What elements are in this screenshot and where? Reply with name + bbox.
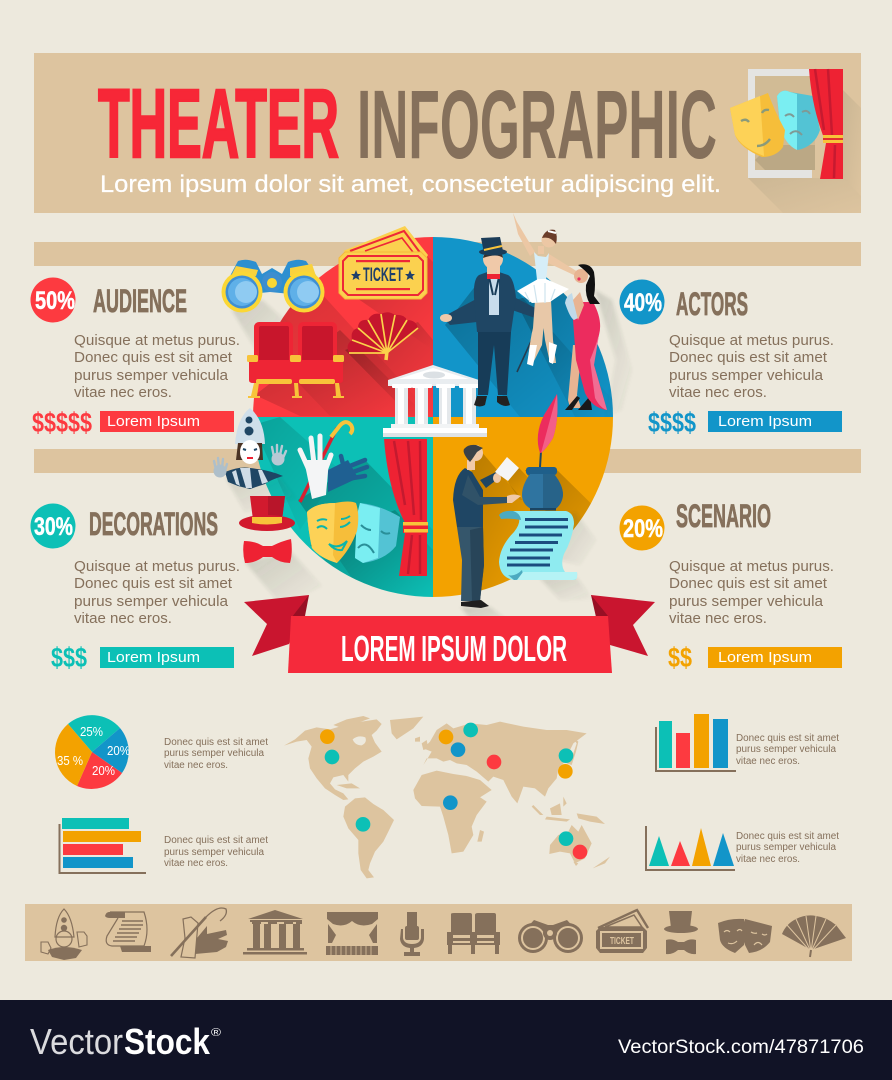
badge 50% <box>30 278 76 322</box>
band: upper tan strip <box>34 242 861 266</box>
strip icon: microphone <box>400 912 424 956</box>
banner text: LOREM IPSUM DOLOR <box>341 628 567 669</box>
heading scenario: SCENARIO <box>676 498 771 534</box>
icon: pierrot clown <box>214 408 286 489</box>
text: bar note: purus semper vehicula <box>164 847 264 858</box>
label bar: Lorem Ipsum <box>107 649 200 666</box>
text: pie note <box>164 737 268 771</box>
icon: framed theatre masks and curtain <box>730 69 861 213</box>
text block: vitae nec eros. <box>74 384 172 401</box>
strip icon: seats <box>447 913 500 954</box>
icon: curtain <box>384 439 428 576</box>
world map with location dots <box>284 716 610 878</box>
icon: quill and ink bottle <box>522 394 563 510</box>
text block: Quisque at metus purus. <box>669 558 834 575</box>
badge 40% <box>620 280 664 324</box>
text: pie note: purus semper vehicula <box>164 748 264 759</box>
text block <box>669 332 834 401</box>
label bar <box>100 411 234 432</box>
heading actors: ACTORS <box>676 286 748 322</box>
footer bar <box>0 1000 892 1080</box>
strip icon: ticket <box>596 910 648 953</box>
badge 40%: 40% <box>624 289 662 317</box>
strip icon: ticket: TICKET <box>610 935 634 947</box>
text block: Donec quis est sit amet <box>74 575 233 592</box>
text: triangle note: Donec quis est sit amet <box>736 831 839 842</box>
footer url: VectorStock.com/47871706 <box>618 1037 864 1058</box>
title: THEATER <box>98 69 339 178</box>
text block: vitae nec eros. <box>669 384 767 401</box>
text block: purus semper vehicula <box>669 593 824 610</box>
text: column note: Donec quis est sit amet <box>736 733 839 744</box>
footer logo: ® <box>211 1027 221 1039</box>
icon: folding fan <box>348 312 418 360</box>
figure: man in tuxedo <box>440 237 546 406</box>
text block: purus semper vehicula <box>669 367 824 384</box>
icon: binoculars <box>222 260 324 312</box>
pie chart <box>55 715 130 789</box>
long shadows off circle <box>226 290 632 626</box>
band: lower tan strip <box>34 449 861 473</box>
badge 30% <box>30 504 76 548</box>
text: triangle note: purus semper vehicula <box>736 842 836 853</box>
icon: paper scroll <box>499 511 577 580</box>
text block <box>669 558 834 627</box>
icon: ticket <box>339 226 428 299</box>
long shadows on circle <box>228 256 613 597</box>
label bar: Lorem Ipsum <box>718 649 812 666</box>
triangle chart <box>646 826 735 870</box>
icon: theatre seats <box>247 322 344 398</box>
strip icon: hat and bow tie <box>664 911 698 954</box>
strip icon: masks <box>718 919 772 953</box>
text block: Donec quis est sit amet <box>74 349 233 366</box>
text: triangle note <box>736 831 839 865</box>
text block: Donec quis est sit amet <box>669 575 828 592</box>
pie chart: 25% <box>80 725 103 739</box>
badge 30%: 30% <box>34 513 73 541</box>
text: column note: vitae nec eros. <box>736 756 800 767</box>
icon: gloves and umbrella <box>300 422 367 502</box>
horizontal bar chart <box>60 818 146 873</box>
text: bar note <box>164 835 268 869</box>
icon: ticket: TICKET <box>363 265 403 286</box>
text block <box>74 558 240 627</box>
panel: audience <box>30 278 240 438</box>
pie chart: 20% <box>107 744 130 758</box>
text: column note <box>736 733 839 767</box>
subtitle: Lorem ipsum dolor sit amet, consectetur adipiscing elit. <box>100 171 721 198</box>
panel: actors <box>620 280 842 438</box>
footer logo <box>30 1021 221 1062</box>
text block <box>74 332 240 401</box>
badge 20%: 20% <box>623 515 663 543</box>
icon strip <box>25 904 852 961</box>
icon: bow tie <box>243 539 292 563</box>
header panel <box>34 53 861 213</box>
price rating: $$$$ <box>648 407 696 438</box>
footer logo: Stock <box>124 1021 211 1062</box>
strip icon: stage <box>326 912 378 955</box>
panel: scenario <box>620 498 842 673</box>
text block: purus semper vehicula <box>74 367 229 384</box>
pie chart: 20% <box>92 764 115 778</box>
figure: ballerina <box>513 213 578 366</box>
text: pie note: Donec quis est sit amet <box>164 737 268 748</box>
text block: Quisque at metus purus. <box>669 332 834 349</box>
badge 50%: 50% <box>35 287 75 315</box>
panel: decorations <box>30 504 240 673</box>
text: bar note: Donec quis est sit amet <box>164 835 268 846</box>
pie chart: 35 % <box>57 754 83 768</box>
text block: purus semper vehicula <box>74 593 229 610</box>
figure: man with book <box>453 445 521 608</box>
strip icon: binoculars <box>518 920 583 953</box>
text: bar note: vitae nec eros. <box>164 858 228 869</box>
text block: Donec quis est sit amet <box>669 349 828 366</box>
footer logo: Vector <box>30 1021 123 1062</box>
label bar <box>100 647 234 668</box>
label bar: Lorem Ipsum <box>107 413 200 430</box>
strip icon: fan <box>782 915 846 957</box>
text: pie note: vitae nec eros. <box>164 760 228 771</box>
label bar <box>708 647 842 668</box>
icon: comedy and tragedy masks <box>307 502 400 563</box>
ribbon banner <box>244 595 655 673</box>
icon: temple <box>383 365 487 437</box>
price rating: $$$$$ <box>32 407 92 438</box>
text: triangle note: vitae nec eros. <box>736 854 800 865</box>
label bar <box>708 411 842 432</box>
strip icon: scroll <box>105 912 151 952</box>
text block: Quisque at metus purus. <box>74 332 240 349</box>
price rating: $$$ <box>51 642 87 673</box>
text: column note: purus semper vehicula <box>736 744 836 755</box>
text block: vitae nec eros. <box>74 610 172 627</box>
strip icon: gloves <box>171 908 228 958</box>
text block: vitae nec eros. <box>669 610 767 627</box>
strip icon: temple <box>243 910 307 954</box>
central four-colour circle chart <box>253 237 613 597</box>
text block: Quisque at metus purus. <box>74 558 240 575</box>
icon: top hat <box>239 496 295 531</box>
heading audience: AUDIENCE <box>93 283 187 319</box>
column chart <box>656 714 736 771</box>
badge 20% <box>620 506 664 550</box>
label bar: Lorem Ipsum <box>718 413 812 430</box>
price rating: $$ <box>668 642 692 673</box>
heading decorations: DECORATIONS <box>89 506 218 542</box>
figure: woman in red dress <box>565 264 607 410</box>
strip icon: pierrot <box>41 909 87 960</box>
